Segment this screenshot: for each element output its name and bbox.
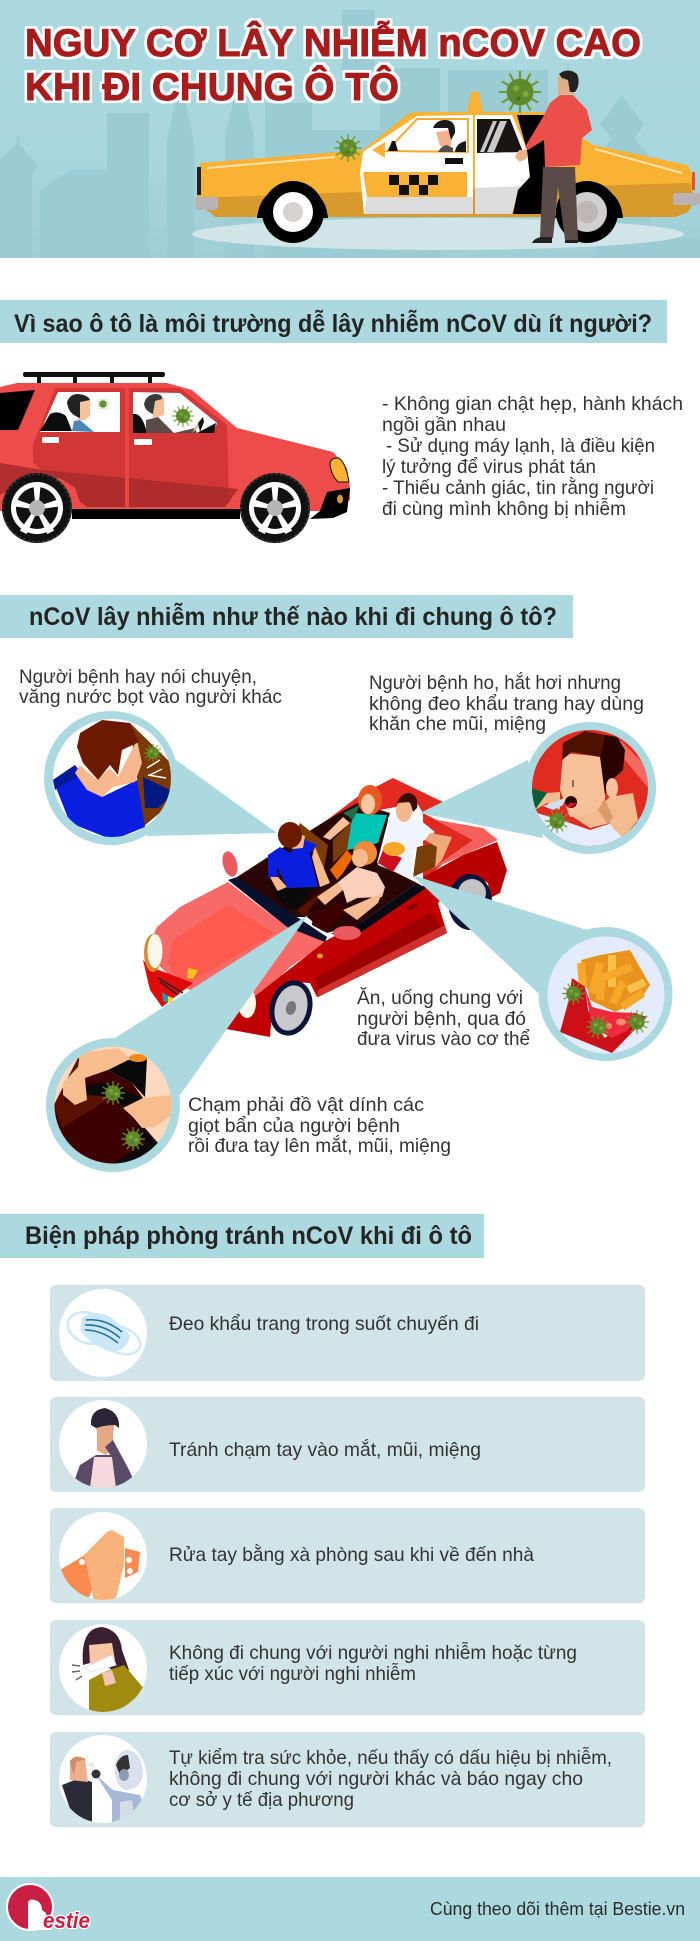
text: reasons: - Sử dụng máy lạnh, là điều kiện bbox=[386, 435, 655, 457]
ground shadow ellipse bbox=[192, 218, 684, 250]
banner: prevention bbox=[0, 1214, 484, 1258]
circle: fries bbox=[538, 927, 672, 1061]
text: touching: Chạm phải đồ vật dính các bbox=[188, 1094, 424, 1116]
banner: how infected bbox=[0, 595, 573, 638]
woman teal bbox=[323, 785, 387, 880]
text: touching: giọt bẩn của người bệnh bbox=[188, 1115, 400, 1137]
card: self check bbox=[50, 1732, 645, 1827]
callout pointer: fries bbox=[412, 875, 587, 993]
passenger bbox=[72, 420, 94, 432]
card: avoid suspected: Không đi chung với người nghi nhiễm hoặc từng bbox=[169, 1641, 577, 1664]
card: wash hands: Rửa tay bằng xà phòng sau khi về đến nhà bbox=[169, 1543, 534, 1566]
card: self check: Tự kiểm tra sức khỏe, nếu thấy có dấu hiệu bị nhiễm, bbox=[169, 1746, 612, 1769]
card: wear mask: Đeo khẩu trang trong suốt chuyến đi bbox=[169, 1313, 479, 1335]
text: talking: văng nước bọt vào người khác bbox=[19, 686, 282, 708]
man pink shirt bbox=[317, 841, 385, 920]
virus on roof bbox=[499, 71, 541, 113]
car windows bbox=[0, 390, 35, 430]
callout pointer: touching bbox=[115, 915, 308, 1095]
interior bbox=[237, 803, 417, 933]
text: reasons bbox=[382, 393, 683, 520]
text: coughing: khăn che mũi, miệng bbox=[369, 713, 546, 735]
virus on hood bbox=[334, 134, 362, 162]
header panel bbox=[0, 0, 700, 258]
text: touching bbox=[188, 1094, 451, 1157]
text: coughing: Người bệnh ho, hắt hơi nhưng bbox=[369, 671, 621, 694]
text: coughing: không đeo khẩu trang hay dùng bbox=[369, 693, 644, 715]
card: avoid touching face: Tránh chạm tay vào mắt, mũi, miệng bbox=[169, 1438, 481, 1461]
text: reasons: lý tưởng để virus phát tán bbox=[382, 456, 596, 478]
text: reasons: đi cùng mình không bị nhiễm bbox=[382, 497, 626, 520]
footer bbox=[0, 1877, 700, 1941]
card: self check: cơ sở y tế địa phương bbox=[169, 1789, 354, 1811]
headlight and bumper bbox=[330, 458, 349, 482]
footer: Cùng theo dõi thêm tại Bestie.vn bbox=[430, 1899, 685, 1919]
text: eating: Ăn, uống chung với bbox=[357, 986, 523, 1009]
text: reasons: - Thiếu cảnh giác, tin rằng người bbox=[382, 476, 654, 499]
taxi driver bbox=[436, 130, 452, 146]
circle: hands touching bbox=[46, 1038, 180, 1172]
banner: how infected: nCoV lây nhiễm như thế nào khi đi chung ô tô? bbox=[29, 601, 557, 631]
icon: man touching face bbox=[75, 1408, 132, 1488]
banner: prevention: Biện pháp phòng tránh nCoV khi đi ô tô bbox=[25, 1222, 472, 1250]
text: talking bbox=[19, 666, 282, 708]
text: reasons: - Không gian chật hẹp, hành khách bbox=[382, 393, 683, 415]
text: eating: người bệnh, qua đó bbox=[357, 1008, 526, 1030]
taxi wheels bbox=[257, 187, 328, 218]
circle: man coughing bbox=[524, 722, 656, 854]
logo: Bestie bbox=[7, 1884, 90, 1933]
man white shirt bbox=[378, 793, 452, 878]
text: coughing bbox=[369, 671, 644, 735]
title: KHI ĐI CHUNG Ô TÔ bbox=[25, 64, 399, 109]
taxi checker bbox=[389, 175, 438, 195]
car wheels bbox=[2, 473, 72, 543]
logo: Bestie: estie bbox=[43, 1908, 90, 1933]
convertible car with four people bbox=[143, 778, 507, 1040]
car hood bbox=[145, 882, 327, 1010]
man blue shirt bbox=[268, 822, 330, 910]
card: avoid suspected: tiếp xúc với người nghi nhiễm bbox=[169, 1662, 416, 1685]
rear wheel bbox=[448, 874, 492, 930]
title bbox=[25, 21, 641, 109]
circle: man talking bbox=[44, 711, 178, 845]
car top rear bbox=[327, 778, 443, 820]
taxi car bbox=[195, 92, 700, 243]
text: touching: rồi đưa tay lên mắt, mũi, miệng bbox=[188, 1134, 451, 1157]
text: talking: Người bệnh hay nói chuyện, bbox=[19, 666, 257, 688]
card: self check: không đi chung với người khác và báo ngay cho bbox=[169, 1768, 583, 1790]
banner: why car bbox=[0, 300, 667, 343]
callout pointer: talking bbox=[147, 757, 277, 836]
callout pointer: coughing bbox=[420, 760, 543, 838]
man in red jacket bbox=[515, 70, 592, 243]
taxi doors bbox=[360, 115, 473, 214]
driver bbox=[146, 417, 197, 433]
title: NGUY CƠ LÂY NHIỄM nCOV CAO bbox=[25, 21, 641, 65]
city skyline background bbox=[0, 10, 700, 258]
text: reasons: ngồi gần nhau bbox=[382, 414, 506, 436]
card: avoid suspected bbox=[50, 1620, 645, 1715]
mirrors bbox=[220, 850, 240, 878]
icon: washing hands bbox=[60, 1530, 140, 1603]
front wheel bbox=[263, 976, 319, 1040]
banner: why car: Vì sao ô tô là môi trường dễ lây nhiễm nCoV dù ít người? bbox=[14, 308, 652, 338]
text: eating bbox=[357, 986, 530, 1050]
taxi windows bbox=[387, 119, 468, 152]
icon: woman coughing bbox=[72, 1627, 145, 1715]
card: avoid touching face bbox=[50, 1397, 645, 1492]
card: wash hands bbox=[50, 1508, 645, 1603]
icon: mask bbox=[63, 1307, 144, 1359]
red car with driver and passenger bbox=[0, 372, 350, 543]
icon: temperature check bbox=[62, 1750, 146, 1825]
card: wear mask bbox=[50, 1285, 645, 1381]
car side bbox=[221, 877, 447, 1037]
text: eating: đưa virus vào cơ thể bbox=[357, 1028, 530, 1050]
front details bbox=[144, 934, 162, 972]
